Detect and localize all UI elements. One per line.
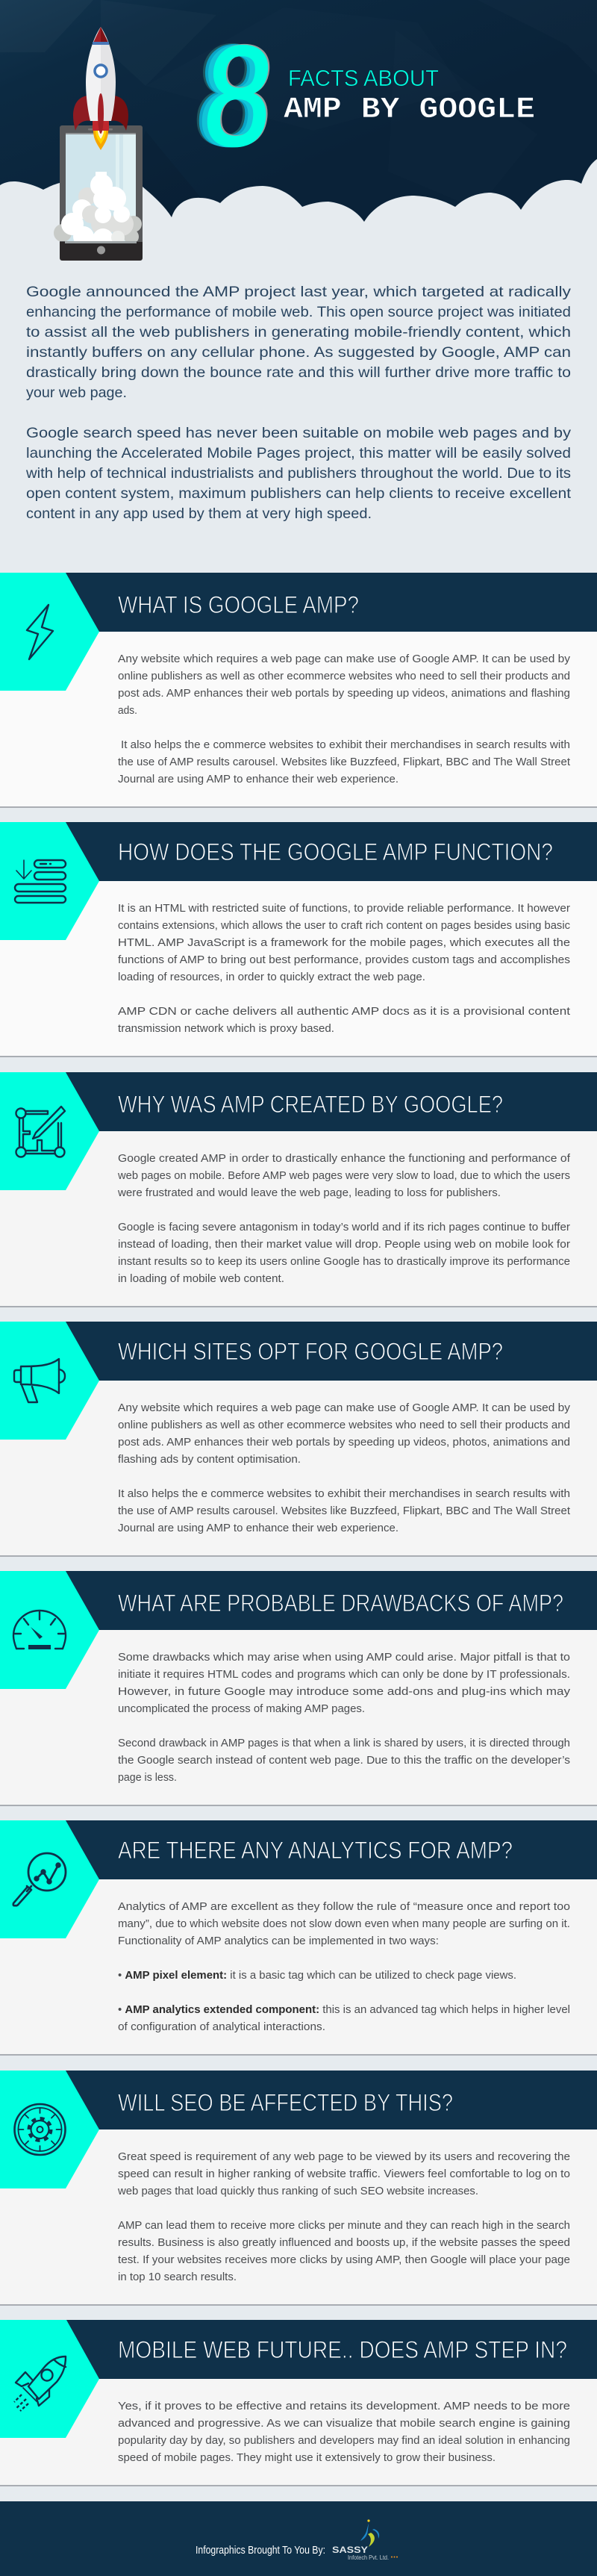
big number 8: 8 (199, 17, 279, 175)
title line one: FACTS ABOUT (288, 65, 439, 91)
logo: sassy infotech: Infotech Pvt. Ltd. (348, 2554, 389, 2561)
body text: • AMP analytics extended component: this is an advanced tag which helps in higher level (118, 2003, 570, 2016)
body text: loading of resources, in order to quickly extract the web page. (118, 971, 425, 983)
body text: However, in future Google may introduce some add-ons and plug-ins which may (118, 1685, 571, 1698)
body text (118, 1401, 571, 1534)
body text: instant results so to keep its users online Google has to drastically improve its performance (118, 1255, 570, 1268)
heading: ARE THERE ANY ANALYTICS FOR AMP? (118, 1837, 513, 1864)
body text: ads. (118, 704, 137, 717)
panel: analytics (0, 1820, 597, 2056)
intro text: instantly buffers on any cellular phone. As suggested by Google, AMP can (26, 344, 571, 361)
body text: advanced and progressive. As we can visualize that mobile search engine is gaining (118, 2417, 570, 2430)
heading: WHICH SITES OPT FOR GOOGLE AMP? (118, 1338, 503, 1365)
icon: stacked bars with arrow (15, 860, 66, 903)
body text (118, 2400, 570, 2464)
title line two: AMP BY GOOGLE (284, 93, 535, 127)
body text: initiate it requires HTML codes and programs which can only be done by IT professionals. (118, 1668, 570, 1681)
body text: post ads. AMP enhances their web portals by speeding up videos, animations and flashing (118, 687, 570, 700)
body text: functions of AMP to bring out best performance, provides custom tags and accomplishes (118, 953, 570, 966)
body text (118, 1900, 570, 2033)
intro text: content in any app used by them at very high speed. (26, 505, 372, 522)
panel: which sites opt (0, 1322, 597, 1557)
intro text (25, 284, 572, 522)
exhaust smoke (54, 172, 142, 241)
body text: web pages that load quickly thus ranking of such SEO website increases. (117, 2185, 478, 2197)
flame (93, 131, 108, 150)
intro text: open content system, maximum publishers can help clients to receive excellent (26, 485, 572, 502)
body text: Analytics of AMP are excellent as they follow the rule of “measure once and report too (118, 1900, 570, 1913)
body text: contains extensions, which allows the user to craft rich content on pages besides using basic (118, 919, 570, 932)
body text (117, 1152, 571, 1285)
illustration: rocket launching from phone (54, 27, 143, 261)
icon: speedometer (13, 1611, 66, 1649)
icon: design pencil and frame (16, 1107, 65, 1157)
icon: gear wheel (15, 2104, 66, 2155)
intro text: Google search speed has never been suitable on mobile web pages and by (26, 425, 571, 441)
body text: online publishers as well as other ecommerce websites who need to sell their products and (118, 1419, 570, 1431)
body text: Journal are using AMP to enhance their web experience. (118, 773, 398, 785)
body text: Yes, if it proves to be effective and retains its development. AMP needs to be more (118, 2400, 570, 2412)
panel: what is google amp (0, 573, 597, 808)
title (188, 16, 535, 175)
body text: It is an HTML with restricted suite of functions, to provide reliable performance. It however (118, 902, 570, 915)
panel: probable drawbacks (0, 1571, 597, 1806)
hero header with cloud edge (0, 0, 597, 258)
phone (60, 125, 143, 261)
body text: the use of AMP results carousel. Websites like Buzzfeed, Flipkart, BBC and The Wall Street (118, 1505, 571, 1517)
body text: web pages on mobile. Before AMP web pages were very slow to load, due to which the users (117, 1169, 570, 1182)
big number 8: 8 (193, 17, 274, 175)
body text: many”, due to which website does not slow down even when many people are surfing on it. (118, 1917, 570, 1930)
body text: Any website which requires a web page can make use of Google AMP. It can be used by (118, 653, 571, 665)
body text: It also helps the e commerce websites to exhibit their merchandises in search results with (118, 1487, 570, 1500)
body text: • AMP pixel element: it is a basic tag which can be utilized to check page views. (118, 1969, 516, 1982)
body text: of configuration of analytical interactions. (118, 2020, 325, 2033)
body text (118, 1651, 571, 1784)
body text: Second drawback in AMP pages is that when a link is shared by users, it is directed through (118, 1737, 570, 1749)
body text: popularity day by day, so publishers and developers may find an ideal solution in enhancing (118, 2434, 570, 2447)
body text: post ads. AMP enhances their web portals by speeding up videos, photos, animations and (118, 1436, 570, 1449)
rocket (73, 27, 128, 134)
intro text: your web page. (26, 385, 127, 401)
body text: test. If your websites receives more clicks by using AMP, then Google will place your page (118, 2253, 570, 2266)
big number 8: 8 (200, 16, 281, 175)
body text: page is less. (118, 1771, 177, 1784)
body text: Journal are using AMP to enhance their web experience. (118, 1522, 398, 1534)
body text (117, 2150, 570, 2283)
body text (118, 902, 571, 1035)
body text: Some drawbacks which may arise when using AMP could arise. Major pitfall is that to (118, 1651, 570, 1664)
body text: results. Business is also greatly influenced and boosts up, if the website passes the speed (118, 2236, 570, 2249)
intro text: enhancing the performance of mobile web. This open source project was initiated (26, 304, 571, 320)
panel: how does google amp function (0, 822, 597, 1057)
body text: instead of loading, then their market value will drop. People using web on mobile look for (118, 1238, 570, 1251)
body text: Functionality of AMP analytics can be implemented in two ways: (118, 1935, 439, 1947)
body text: uncomplicated the process of making AMP pages. (118, 1702, 365, 1715)
body text: Google is facing severe antagonism in today’s world and if its rich pages continue to buffer (118, 1221, 570, 1233)
body text: speed can result in higher ranking of website traffic. Viewers feel comfortable to log on to (118, 2168, 570, 2180)
body text: the Google search instead of content web page. Due to this the traffic on the developer’s (118, 1754, 570, 1767)
footer (0, 2501, 597, 2576)
body text: HTML. AMP JavaScript is a framework for the mobile pages, which executes all the (118, 936, 570, 949)
body text: AMP can lead them to receive more clicks per minute and they can reach high in the search (118, 2219, 570, 2232)
body text: transmission network which is proxy based. (118, 1022, 334, 1035)
intro text: with help of technical industrialists and publishers throughout the world. Due to its (25, 465, 571, 482)
big number 8: 8 (188, 16, 269, 174)
icon: megaphone (14, 1359, 65, 1402)
panel: seo (0, 2071, 597, 2306)
big number 8: 8 (190, 16, 271, 175)
icon: magnifier with chart (13, 1853, 66, 1905)
panel: mobile web future (0, 2320, 597, 2486)
body text (118, 653, 571, 785)
icon: lightning bolt (27, 605, 53, 659)
body text: Any website which requires a web page can make use of Google AMP. It can be used by (118, 1401, 571, 1414)
body text: online publishers as well as other ecommerce websites who need to sell their products and (118, 670, 570, 682)
intro text: to assist all the web publishers in generating mobile-friendly content, which (26, 324, 571, 340)
logo: sassy infotech: SASSY (332, 2546, 368, 2555)
intro text: launching the Accelerated Mobile Pages project, this matter will be easily solved (26, 445, 571, 461)
cloud edge (0, 159, 597, 258)
body text: in top 10 search results. (118, 2271, 237, 2283)
panel: why was amp created (0, 1072, 597, 1307)
body text: flashing ads by content optimisation. (118, 1453, 301, 1466)
heading: WHAT IS GOOGLE AMP? (118, 591, 359, 618)
body text: in loading of mobile web content. (118, 1272, 284, 1285)
body text: AMP CDN or cache delivers all authentic AMP docs as it is a provisional content (118, 1005, 571, 1018)
icon: rocket (14, 2356, 66, 2411)
body text: speed of mobile pages. They might use it extensively to grow their business. (118, 2451, 496, 2464)
heading: WHY WAS AMP CREATED BY GOOGLE? (118, 1091, 503, 1118)
body text: the use of AMP results carousel. Websites like Buzzfeed, Flipkart, BBC and The Wall Street (118, 756, 571, 768)
intro text: Google announced the AMP project last year, which targeted at radically (26, 284, 571, 300)
body text: Google created AMP in order to drastically enhance the functioning and performance of (118, 1152, 571, 1165)
credit text: Infographics Brought To You By: (196, 2544, 325, 2557)
body text: Great speed is requirement of any web page to be viewed by its users and recovering the (118, 2150, 570, 2163)
heading: WILL SEO BE AFFECTED BY THIS? (118, 2089, 453, 2116)
body text: It also helps the e commerce websites to exhibit their merchandises in search results with (121, 738, 570, 751)
logo: sassy infotech (332, 2519, 398, 2561)
body text: were frustrated and would leave the web page, leading to loss for publishers. (117, 1186, 501, 1199)
intro text: drastically bring down the bounce rate and this will further drive more traffic to (26, 364, 571, 381)
